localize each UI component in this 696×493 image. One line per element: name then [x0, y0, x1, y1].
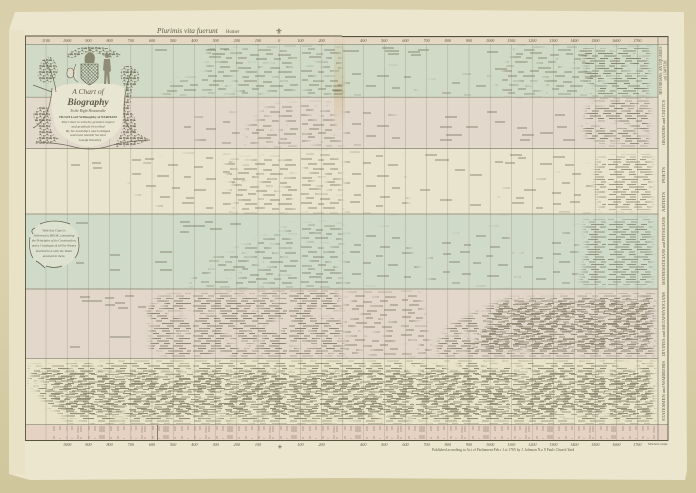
icon: fleur-de-lis top: ⚜ — [275, 27, 283, 36]
bottom scale labels — [63, 442, 642, 447]
top scale labels: 1500 — [591, 38, 600, 43]
icon: crest — [85, 48, 95, 63]
bottom scale labels: 900 — [85, 442, 92, 447]
band: mathematicians and physicians — [25, 214, 658, 289]
bottom scale labels: 800 — [106, 442, 114, 447]
note backing — [28, 220, 80, 268]
top scale labels: 1600 — [612, 38, 621, 43]
top scale labels: 1100 — [507, 38, 516, 43]
bottom scale labels: 1000 — [486, 442, 495, 447]
label: historians: HISTORIANS, ANTIQUARIES — [659, 46, 664, 94]
top scale labels: 400 — [360, 38, 367, 43]
title text: A Chart of — [71, 87, 105, 96]
icon: coat of arms — [81, 64, 98, 85]
title text: and gratitude Inscribed — [71, 124, 105, 128]
top scale labels — [42, 38, 642, 43]
bottom scale labels: 700 — [128, 442, 135, 447]
medium clusters — [160, 44, 598, 358]
bottom scale labels: 1400 — [570, 442, 579, 447]
title text — [59, 87, 117, 142]
top scale labels: 800 — [445, 38, 452, 43]
top scale labels: 1100 — [42, 38, 51, 43]
top scale labels: 1000 — [63, 38, 72, 43]
bottom scale labels: 1700 — [633, 442, 642, 447]
band: divines — [25, 289, 658, 359]
title text: By his Lordship's much obliged — [66, 129, 110, 133]
top scale labels: 600 — [402, 38, 410, 43]
bottom scale labels: 1600 — [612, 442, 621, 447]
bottom scale labels: 200 — [318, 442, 326, 447]
note text: annexed to them. — [43, 254, 65, 258]
label: mathematicians: MATHEMATICIANS and PHYSICIANS — [662, 217, 666, 285]
bottom scale labels: 700 — [423, 442, 431, 447]
bottom scale labels: 1100 — [507, 442, 516, 447]
cartouche shield backing — [52, 84, 124, 147]
top scale labels: 1300 — [549, 38, 558, 43]
bottom scale labels: 100 — [255, 442, 262, 447]
label: poets: POETS — [662, 167, 666, 183]
title text: Joseph Priestley — [79, 138, 102, 142]
bottom scale labels: 900 — [466, 442, 473, 447]
title text: and most humble Servant — [70, 133, 107, 137]
top scale labels: 400 — [191, 38, 198, 43]
bottom scale labels: 1000 — [63, 442, 72, 447]
title text: This Chart is with the greatest respect — [61, 120, 116, 124]
icon: swan supporter — [67, 64, 78, 82]
note text: With this Chart is — [42, 229, 66, 233]
title text: HUGH Lord Willoughby of PARHAM — [59, 115, 117, 119]
foliage: left tree — [34, 57, 60, 144]
bottom scale labels: 400 — [191, 442, 198, 447]
label: orators: ORATORS and CRITICS — [662, 100, 666, 145]
note flourishes — [29, 221, 79, 268]
title text: To the Right Honourable — [70, 109, 106, 113]
heading: Homer: Homer — [226, 30, 240, 35]
bottom scale labels: 800 — [445, 442, 452, 447]
foliage: crest wreath — [66, 47, 122, 58]
icon: fleur-de-lis bottom: ⚜ — [277, 444, 283, 451]
label: lawyers: and LAWYERS — [664, 60, 668, 80]
top scale labels: 300 — [212, 38, 220, 43]
top scale labels: 100 — [255, 38, 262, 43]
reign tick marks — [50, 426, 656, 439]
book note cartouche — [28, 220, 80, 268]
note text: and a Catalogue of all the Names — [32, 244, 77, 248]
vertical century grid — [46, 44, 637, 425]
fold stain — [334, 37, 345, 132]
top scale labels: 700 — [423, 38, 431, 43]
top scale labels: 500 — [381, 38, 388, 43]
label: artists: ARTISTS — [662, 192, 666, 212]
top scale labels: 200 — [318, 38, 326, 43]
foliage: right tree — [112, 66, 150, 147]
right column band labels — [659, 46, 668, 421]
top scale labels: 100 — [297, 38, 304, 43]
bottom scale labels: 600 — [149, 442, 156, 447]
bottom scale labels: 1500 — [591, 442, 600, 447]
top scale labels: 0 — [278, 38, 281, 43]
note text: the Principles of its Construction, — [32, 239, 76, 244]
label: divines: DIVINES and METAPHYSICIANS — [662, 292, 666, 356]
bottom scale labels: 600 — [402, 442, 410, 447]
left margin strip — [9, 30, 25, 474]
publisher imprint: Published according to Act of Parliament Feb.r 1.st 1765 by J. Johnson N.o 8 Pauls Church Yard — [432, 448, 574, 452]
bottom scale labels: 1200 — [528, 442, 537, 447]
top scale labels: 1200 — [528, 38, 537, 43]
bottom scale labels: 300 — [212, 442, 220, 447]
biography life-span dashes — [25, 44, 658, 425]
note text: inserted in it with the Dates — [36, 249, 73, 253]
tree trunks and scroll — [33, 60, 150, 149]
icon: supporter figure — [103, 53, 111, 84]
band: statesmen — [25, 359, 658, 425]
top time scale band — [25, 36, 668, 44]
heading: motto: Plurimis vita fuerunt — [156, 26, 219, 35]
bottom scale labels: 500 — [170, 442, 177, 447]
bottom scale labels: 100 — [297, 442, 304, 447]
band: poets and artists — [25, 148, 658, 214]
band: orators — [25, 97, 658, 148]
note text — [32, 229, 77, 258]
chart bands — [25, 44, 658, 425]
individual entries — [70, 48, 575, 347]
filled dense areas — [35, 154, 654, 418]
top scale labels: 900 — [466, 38, 473, 43]
bottom scale labels: 500 — [381, 442, 388, 447]
top scale labels: 800 — [106, 38, 114, 43]
bottom band dividers — [46, 425, 637, 440]
dense clusters — [25, 44, 658, 425]
top scale labels: 600 — [149, 38, 156, 43]
engraver credit: Mitchell sculpt. — [648, 442, 668, 446]
top scale labels: 900 — [85, 38, 92, 43]
title text: Biography — [66, 98, 109, 108]
top scale labels: 500 — [170, 38, 177, 43]
top scale labels: 700 — [128, 38, 135, 43]
band rules and frame — [25, 36, 668, 440]
band: historians — [25, 44, 658, 97]
sparse clusters — [127, 64, 595, 288]
label column — [658, 44, 668, 425]
bottom scale labels: 1300 — [549, 442, 558, 447]
note text: Delivered a BOOK, containing — [33, 234, 75, 239]
label: statesmen: STATESMEN and WARRIORS — [662, 361, 666, 421]
top scale labels: 200 — [234, 38, 241, 43]
top scale labels: 1400 — [570, 38, 579, 43]
bottom scale labels: 400 — [360, 442, 367, 447]
top scale labels: 1000 — [486, 38, 495, 43]
bottom reign band — [25, 425, 668, 440]
top scale labels: 1700 — [633, 38, 642, 43]
bottom scale labels: 200 — [234, 442, 241, 447]
title cartouche — [33, 47, 150, 149]
